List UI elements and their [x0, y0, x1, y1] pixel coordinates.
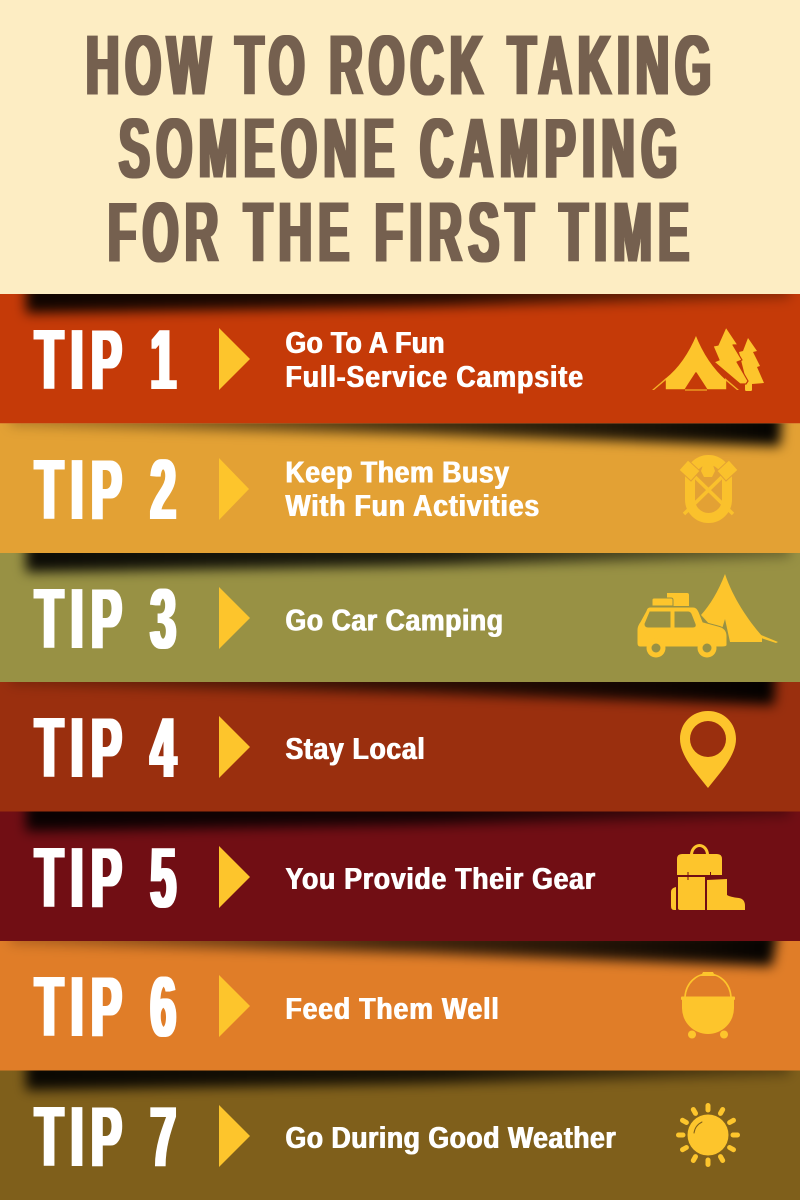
- panel: tip 7: [0, 1059, 800, 1200]
- icon: map pin: [680, 711, 736, 788]
- tip 3 arrow: [219, 587, 250, 649]
- icon: sun: [678, 1106, 738, 1164]
- tip 5 text: You Provide Their Gear: [286, 862, 595, 897]
- icon: car and tent: [637, 574, 778, 658]
- tip 1 text: Full-Service Campsite: [286, 360, 583, 395]
- tip 1 arrow: [219, 328, 250, 390]
- title: [86, 19, 711, 280]
- title: FOR THE FIRST TIME: [108, 186, 689, 280]
- panel: tip 5: [0, 800, 800, 941]
- icon: crossed paddles and ring: [679, 460, 738, 518]
- title: HOW TO ROCK TAKING: [86, 19, 711, 113]
- panel: tip 2: [0, 412, 800, 553]
- tip 4 arrow: [219, 716, 250, 778]
- tip 1 text: Go To A Fun: [286, 326, 445, 361]
- tip 2 arrow: [219, 458, 249, 520]
- tip 6 text: Feed Them Well: [286, 992, 499, 1027]
- tip 6 label: TIP 6: [35, 960, 184, 1055]
- title: SOMEONE CAMPING: [119, 102, 677, 196]
- tip 7 arrow: [219, 1105, 250, 1167]
- icon: backpack and boot: [671, 844, 745, 910]
- tip 2 text: Keep Them Busy: [286, 456, 509, 490]
- tip 2 text: With Fun Activities: [286, 489, 539, 524]
- panel: tip 3: [0, 541, 800, 682]
- panel: tip 6: [0, 930, 800, 1070]
- tip 6 arrow: [219, 975, 250, 1037]
- tip 7 label: TIP 7: [35, 1090, 184, 1185]
- panel: tip 4: [0, 670, 800, 812]
- tip 4 text: Stay Local: [286, 732, 425, 767]
- panel: tip 1: [0, 282, 800, 423]
- tip 5 arrow: [219, 846, 250, 908]
- tip 7 text: Go During Good Weather: [286, 1121, 616, 1156]
- icon: tent and trees: [652, 327, 764, 391]
- tip 5 label: TIP 5: [35, 831, 184, 926]
- icon: cooking pot: [681, 972, 735, 1038]
- tip 2 label: TIP 2: [35, 443, 184, 538]
- tip 3 text: Go Car Camping: [286, 604, 503, 638]
- tip 1 label: TIP 1: [35, 313, 184, 408]
- tip 2 text: [286, 456, 539, 524]
- tip 3 label: TIP 3: [35, 572, 184, 667]
- background: cream header: [0, 0, 800, 294]
- tip 4 label: TIP 4: [35, 701, 184, 796]
- tip 1 text: [286, 326, 583, 395]
